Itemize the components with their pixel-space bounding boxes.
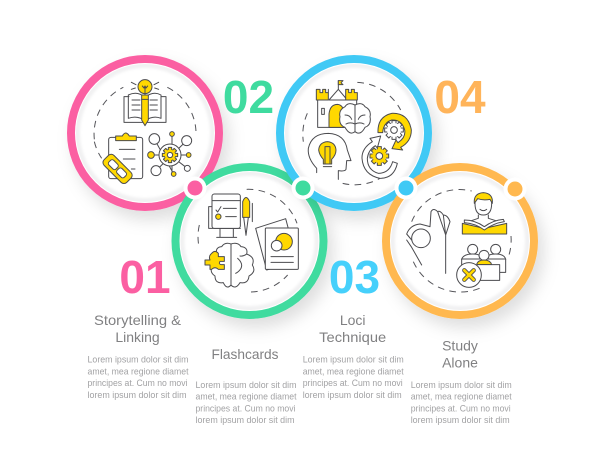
- number 01: 01: [119, 251, 171, 303]
- number 02: 02: [223, 71, 274, 123]
- text block: storytelling and linking: Lorem ipsum dolor sit dim: [88, 355, 189, 365]
- text block: flashcards: lorem ipsum dolor sit dim: [196, 415, 295, 425]
- text block: flashcards: principes at. Cum no movi: [196, 403, 296, 413]
- text block: storytelling and linking: principes at. Cum no movi: [88, 378, 188, 388]
- number 03: 03: [329, 251, 380, 303]
- text block: loci technique: lorem ipsum dolor sit dim: [303, 390, 402, 400]
- text block: storytelling and linking: [88, 355, 189, 400]
- panel: flashcards circle: [176, 167, 324, 315]
- text block: loci technique: Lorem ipsum dolor sit dim: [303, 355, 404, 365]
- panel: storytelling and linking circle: [71, 59, 219, 207]
- heading: loci technique: Technique: [319, 329, 386, 345]
- icon: book, bulb, clipboard, chain and network: [94, 80, 196, 185]
- heading: study alone: [442, 338, 478, 370]
- text block: study alone: Lorem ipsum dolor sit dim: [411, 380, 512, 390]
- text block: study alone: [411, 380, 512, 425]
- connector dot: blue: [394, 176, 418, 200]
- text block: loci technique: [303, 355, 404, 400]
- panel: study alone circle: [386, 167, 534, 315]
- panel: loci technique circle: [280, 59, 428, 207]
- heading: study alone: Alone: [442, 354, 478, 370]
- text block: loci technique: amet, mea regione diamet: [303, 366, 404, 376]
- text block: study alone: principes at. Cum no movi: [411, 403, 511, 413]
- heading: study alone: Study: [442, 338, 478, 354]
- text block: flashcards: Lorem ipsum dolor sit dim: [196, 380, 297, 390]
- text block: storytelling and linking: lorem ipsum dolor sit dim: [88, 390, 187, 400]
- text block: study alone: lorem ipsum dolor sit dim: [411, 415, 510, 425]
- text block: study alone: amet, mea regione diamet: [411, 392, 512, 402]
- text block: loci technique: principes at. Cum no movi: [303, 378, 403, 388]
- connector dot: orange: [504, 178, 526, 200]
- heading: loci technique: [319, 312, 386, 345]
- heading: storytelling and linking: Storytelling &: [94, 312, 182, 328]
- connector dot: green: [292, 176, 314, 200]
- icon: tablet, pen, brain, puzzle and cards: [198, 189, 298, 292]
- heading: flashcards: Flashcards: [212, 346, 278, 362]
- icon: ok hand, reader and classroom: [407, 190, 511, 292]
- text block: flashcards: amet, mea regione diamet: [196, 392, 297, 402]
- heading: loci technique: Loci: [340, 312, 366, 328]
- connector dot: pink: [184, 176, 206, 200]
- icon: castle, brain, head and gears: [303, 81, 411, 185]
- heading: storytelling and linking: Linking: [115, 329, 160, 345]
- text block: flashcards: [196, 380, 297, 425]
- heading: storytelling and linking: [94, 312, 182, 345]
- text block: storytelling and linking: amet, mea regione diamet: [88, 366, 189, 376]
- number 04: 04: [434, 71, 486, 123]
